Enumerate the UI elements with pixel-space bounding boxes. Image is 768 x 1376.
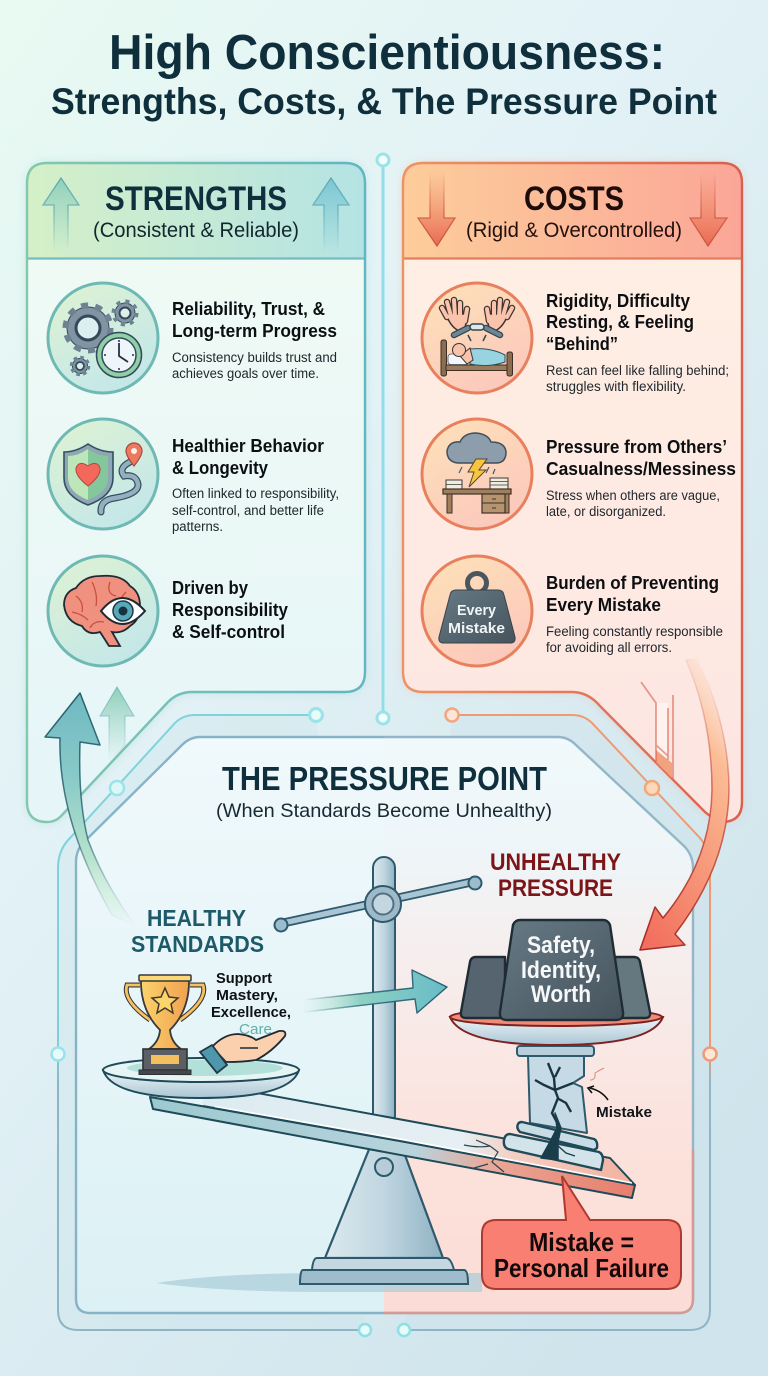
text: support mastery excellence care: Care	[239, 1022, 272, 1038]
scale top bar	[274, 876, 482, 932]
ground shadow	[156, 1273, 482, 1292]
label: mistake crack	[588, 1068, 652, 1121]
text: rigidity: Rigidity, Difficulty	[546, 291, 690, 311]
title: High Conscientiousness:	[109, 26, 665, 80]
scale column	[373, 857, 395, 1127]
column under right dish	[504, 1046, 603, 1170]
label: unhealthy pressure: PRESSURE	[498, 875, 613, 902]
text: pressure from others: Pressure from Others’	[546, 437, 727, 457]
text: burden of preventing: Every Mistake	[546, 595, 661, 615]
text: driven by responsibility	[172, 578, 288, 642]
subheading: costs: (Rigid & Overcontrolled)	[466, 219, 682, 242]
icon: brain and eye	[48, 556, 158, 666]
text: rigidity: “Behind”	[546, 334, 618, 354]
panel: the pressure point	[76, 737, 693, 1313]
text: reliability: achieves goals over time.	[172, 366, 319, 381]
icon: every mistake weight: Every	[457, 602, 497, 619]
center connector line	[377, 154, 389, 724]
icon: every mistake weight: Mistake	[448, 620, 505, 637]
text: healthier behavior: Healthier Behavior	[172, 436, 324, 456]
text: rigidity: struggles with flexibility.	[546, 379, 686, 394]
icon: trophy	[126, 975, 204, 1074]
text: driven by responsibility: Driven by	[172, 578, 248, 598]
icon: storm cloud over desk	[422, 419, 532, 529]
text: reliability: Reliability, Trust, &	[172, 299, 325, 319]
subheading: strengths: (Consistent & Reliable)	[93, 219, 299, 242]
label: unhealthy pressure	[490, 849, 621, 902]
label: healthy standards	[131, 905, 264, 957]
text: burden of preventing: Feeling constantly responsible	[546, 624, 723, 639]
connector frame: left	[52, 708, 371, 1336]
icon: shield and path	[48, 419, 158, 529]
arrow: healthy standards up to strengths	[45, 693, 135, 925]
text: rigidity	[546, 291, 729, 394]
weights: safety identity worth: Identity,	[521, 957, 601, 984]
panel: strengths	[27, 163, 365, 822]
icon: costs header arrow right	[690, 172, 727, 246]
weights: safety identity worth: Safety,	[527, 932, 595, 959]
text: burden of preventing: Burden of Preventing	[546, 573, 719, 593]
label: healthy standards: HEALTHY	[147, 905, 246, 931]
callout: mistake equals personal failure: Mistake =	[529, 1227, 634, 1257]
icon: strengths header arrow left	[43, 178, 79, 252]
arrow: healthy to unhealthy	[303, 970, 447, 1013]
icon: every mistake weight	[422, 556, 532, 666]
callout: mistake equals personal failure	[482, 1176, 681, 1289]
text: pressure from others: late, or disorganized.	[546, 504, 666, 519]
heading: the pressure point: THE PRESSURE POINT	[222, 760, 547, 797]
text: reliability: Consistency builds trust and	[172, 350, 337, 365]
icon: handcuffed hands and bed	[422, 283, 532, 393]
text: reliability: Long-term Progress	[172, 321, 337, 341]
text: pressure from others	[546, 437, 736, 519]
small arrow up behind strengths	[100, 687, 134, 762]
text: reliability	[172, 299, 337, 381]
text: healthier behavior: patterns.	[172, 519, 223, 534]
label: unhealthy pressure: UNHEALTHY	[490, 849, 621, 876]
weights: safety identity worth	[461, 920, 650, 1020]
title	[51, 26, 717, 122]
label: healthy standards: STANDARDS	[131, 931, 264, 957]
connector frame: right	[398, 708, 716, 1336]
text: support mastery excellence care: Support	[216, 971, 272, 987]
text: support mastery excellence care: Mastery,	[216, 988, 278, 1004]
text: burden of preventing: for avoiding all errors.	[546, 640, 672, 655]
arrow: costs down to unhealthy pressure	[640, 658, 729, 950]
text: pressure from others: Stress when others are vague,	[546, 488, 720, 503]
right dish	[450, 1008, 663, 1045]
text: driven by responsibility: Responsibility	[172, 600, 288, 620]
panel: costs	[403, 163, 742, 822]
left dish	[103, 1058, 299, 1098]
text: healthier behavior: self-control, and better life	[172, 503, 324, 518]
balance scale	[103, 857, 663, 1284]
text: support mastery excellence care: Excellence,	[211, 1005, 291, 1021]
text: healthier behavior: Often linked to responsibility,	[172, 486, 339, 501]
icon: gears and clock	[48, 283, 158, 393]
callout: mistake equals personal failure: Personal Failure	[494, 1253, 669, 1283]
heading: strengths: STRENGTHS	[105, 180, 287, 218]
text: healthier behavior: & Longevity	[172, 458, 268, 478]
heading: costs: COSTS	[524, 180, 624, 218]
text: rigidity: Rest can feel like falling behind;	[546, 363, 729, 378]
icon: caring hand	[200, 1031, 285, 1073]
decorative arrow in costs panel	[641, 682, 673, 778]
scale beam	[150, 1083, 635, 1198]
subheading: pressure point: (When Standards Become Unhealthy)	[216, 800, 552, 822]
text: burden of preventing	[546, 573, 723, 655]
weights: safety identity worth: Worth	[531, 981, 591, 1008]
scale base	[300, 1147, 468, 1284]
label: mistake crack: Mistake	[596, 1105, 652, 1121]
text: rigidity: Resting, & Feeling	[546, 312, 694, 332]
title: Strengths, Costs, & The Pressure Point	[51, 81, 717, 122]
icon: costs header arrow left	[418, 172, 455, 246]
text: healthier behavior	[172, 436, 339, 534]
text: pressure from others: Casualness/Messiness	[546, 459, 736, 479]
text: driven by responsibility: & Self-control	[172, 622, 285, 642]
icon: strengths header arrow right	[313, 178, 349, 252]
text: support mastery excellence care	[211, 971, 291, 1038]
